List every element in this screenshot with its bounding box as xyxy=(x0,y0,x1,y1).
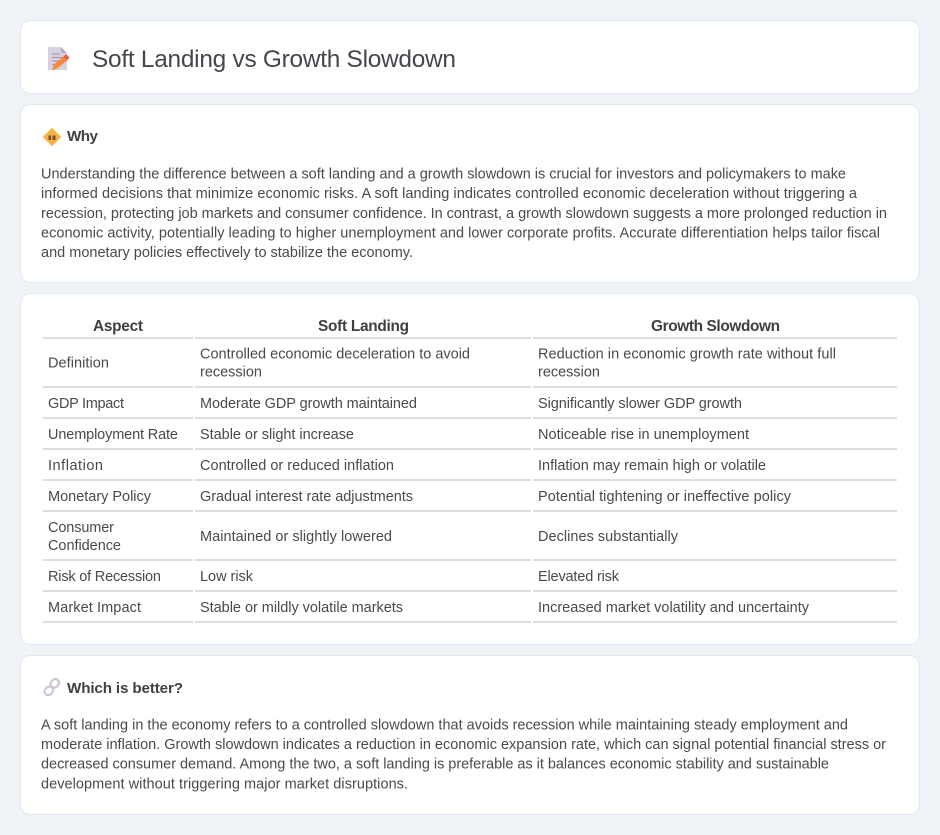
row: risk of recession: Low risk xyxy=(200,569,254,585)
table header: Growth Slowdown xyxy=(651,318,780,335)
panel: which is better xyxy=(20,656,920,814)
text block: why: economic activity, potentially leading to higher unemployment and lower corporate profits. Accurate differentiation helps tailor fiscal xyxy=(41,225,880,241)
row: inflation: Inflation xyxy=(48,458,103,474)
row: definition: Reduction in economic growth rate without full xyxy=(538,346,836,362)
row: consumer confidence: Maintained or slightly lowered xyxy=(200,529,392,545)
text block: why xyxy=(41,167,887,261)
text block: why: informed decisions that minimize economic risks. A soft landing indicates controlled economic deceleration without triggering a xyxy=(41,186,858,202)
row: definition xyxy=(48,346,836,380)
row: consumer confidence xyxy=(48,520,679,554)
icon: memo with pencil xyxy=(48,47,70,70)
heading: which is better: Which is better? xyxy=(67,680,183,697)
row: definition: Controlled economic deceleration to avoid xyxy=(200,346,470,362)
row: market impact xyxy=(48,600,810,616)
table header: Aspect xyxy=(93,318,143,335)
icon: warning diamond xyxy=(44,128,60,146)
row: unemployment rate: Noticeable rise in unemployment xyxy=(538,427,749,443)
heading: why: Why xyxy=(67,128,99,145)
text block: why: Understanding the difference between a soft landing and a growth slowdown is crucial for investors and policymakers to make xyxy=(41,167,846,183)
row: unemployment rate: Stable or slight increase xyxy=(200,427,354,443)
panel: comparison table xyxy=(20,294,920,644)
row: monetary policy: Monetary Policy xyxy=(48,489,152,505)
row: inflation: Controlled or reduced inflation xyxy=(200,458,394,474)
row: monetary policy: Gradual interest rate adjustments xyxy=(200,489,413,505)
row: definition: recession xyxy=(200,364,262,380)
text block: which is better: A soft landing in the economy refers to a controlled slowdown that avoids recession while maintaining steady employment and xyxy=(41,718,848,734)
row: unemployment rate xyxy=(48,427,749,443)
text block: why: and monetary policies effectively to stabilize the economy. xyxy=(41,245,413,261)
row: market impact: Market Impact xyxy=(48,600,141,616)
panel: title card xyxy=(20,20,920,94)
row: gdp impact xyxy=(48,396,742,412)
table header: Soft Landing xyxy=(318,318,409,335)
row: market impact: Stable or mildly volatile markets xyxy=(200,600,403,616)
text block: which is better: moderate inflation. Growth slowdown indicates a reduction in economic expansion rate, which can signal potential financial stress or xyxy=(41,737,886,753)
row: market impact: Increased market volatility and uncertainty xyxy=(538,600,810,616)
text block: which is better xyxy=(41,718,886,792)
text block: which is better: development without triggering major market disruptions. xyxy=(41,776,408,792)
row: definition: Definition xyxy=(48,356,109,372)
row: risk of recession xyxy=(48,569,620,585)
row: risk of recession: Risk of Recession xyxy=(48,569,161,585)
row: risk of recession: Elevated risk xyxy=(538,569,620,585)
panel: why xyxy=(20,104,920,282)
table header xyxy=(93,318,780,335)
row: inflation xyxy=(48,458,766,474)
row: consumer confidence: Declines substantially xyxy=(538,529,679,545)
icon: link xyxy=(43,677,61,697)
text block: which is better: decreased consumer demand. Among the two, a soft landing is preferable as it balances economic stability and sustainable xyxy=(41,757,829,773)
text block: why: recession, protecting job markets and consumer confidence. In contrast, a growth slowdown suggests a more prolonged reduction in xyxy=(41,206,887,222)
row: monetary policy: Potential tightening or ineffective policy xyxy=(538,489,792,505)
row: gdp impact: GDP Impact xyxy=(48,396,124,412)
row: consumer confidence: Confidence xyxy=(48,538,121,554)
row: consumer confidence: Consumer xyxy=(48,520,114,536)
row: inflation: Inflation may remain high or volatile xyxy=(538,458,766,474)
row: unemployment rate: Unemployment Rate xyxy=(48,427,178,443)
row: gdp impact: Moderate GDP growth maintained xyxy=(200,396,417,412)
row: gdp impact: Significantly slower GDP growth xyxy=(538,396,742,412)
row: monetary policy xyxy=(48,489,792,505)
row: definition: recession xyxy=(538,364,600,380)
title: Soft Landing vs Growth Slowdown xyxy=(92,46,456,73)
